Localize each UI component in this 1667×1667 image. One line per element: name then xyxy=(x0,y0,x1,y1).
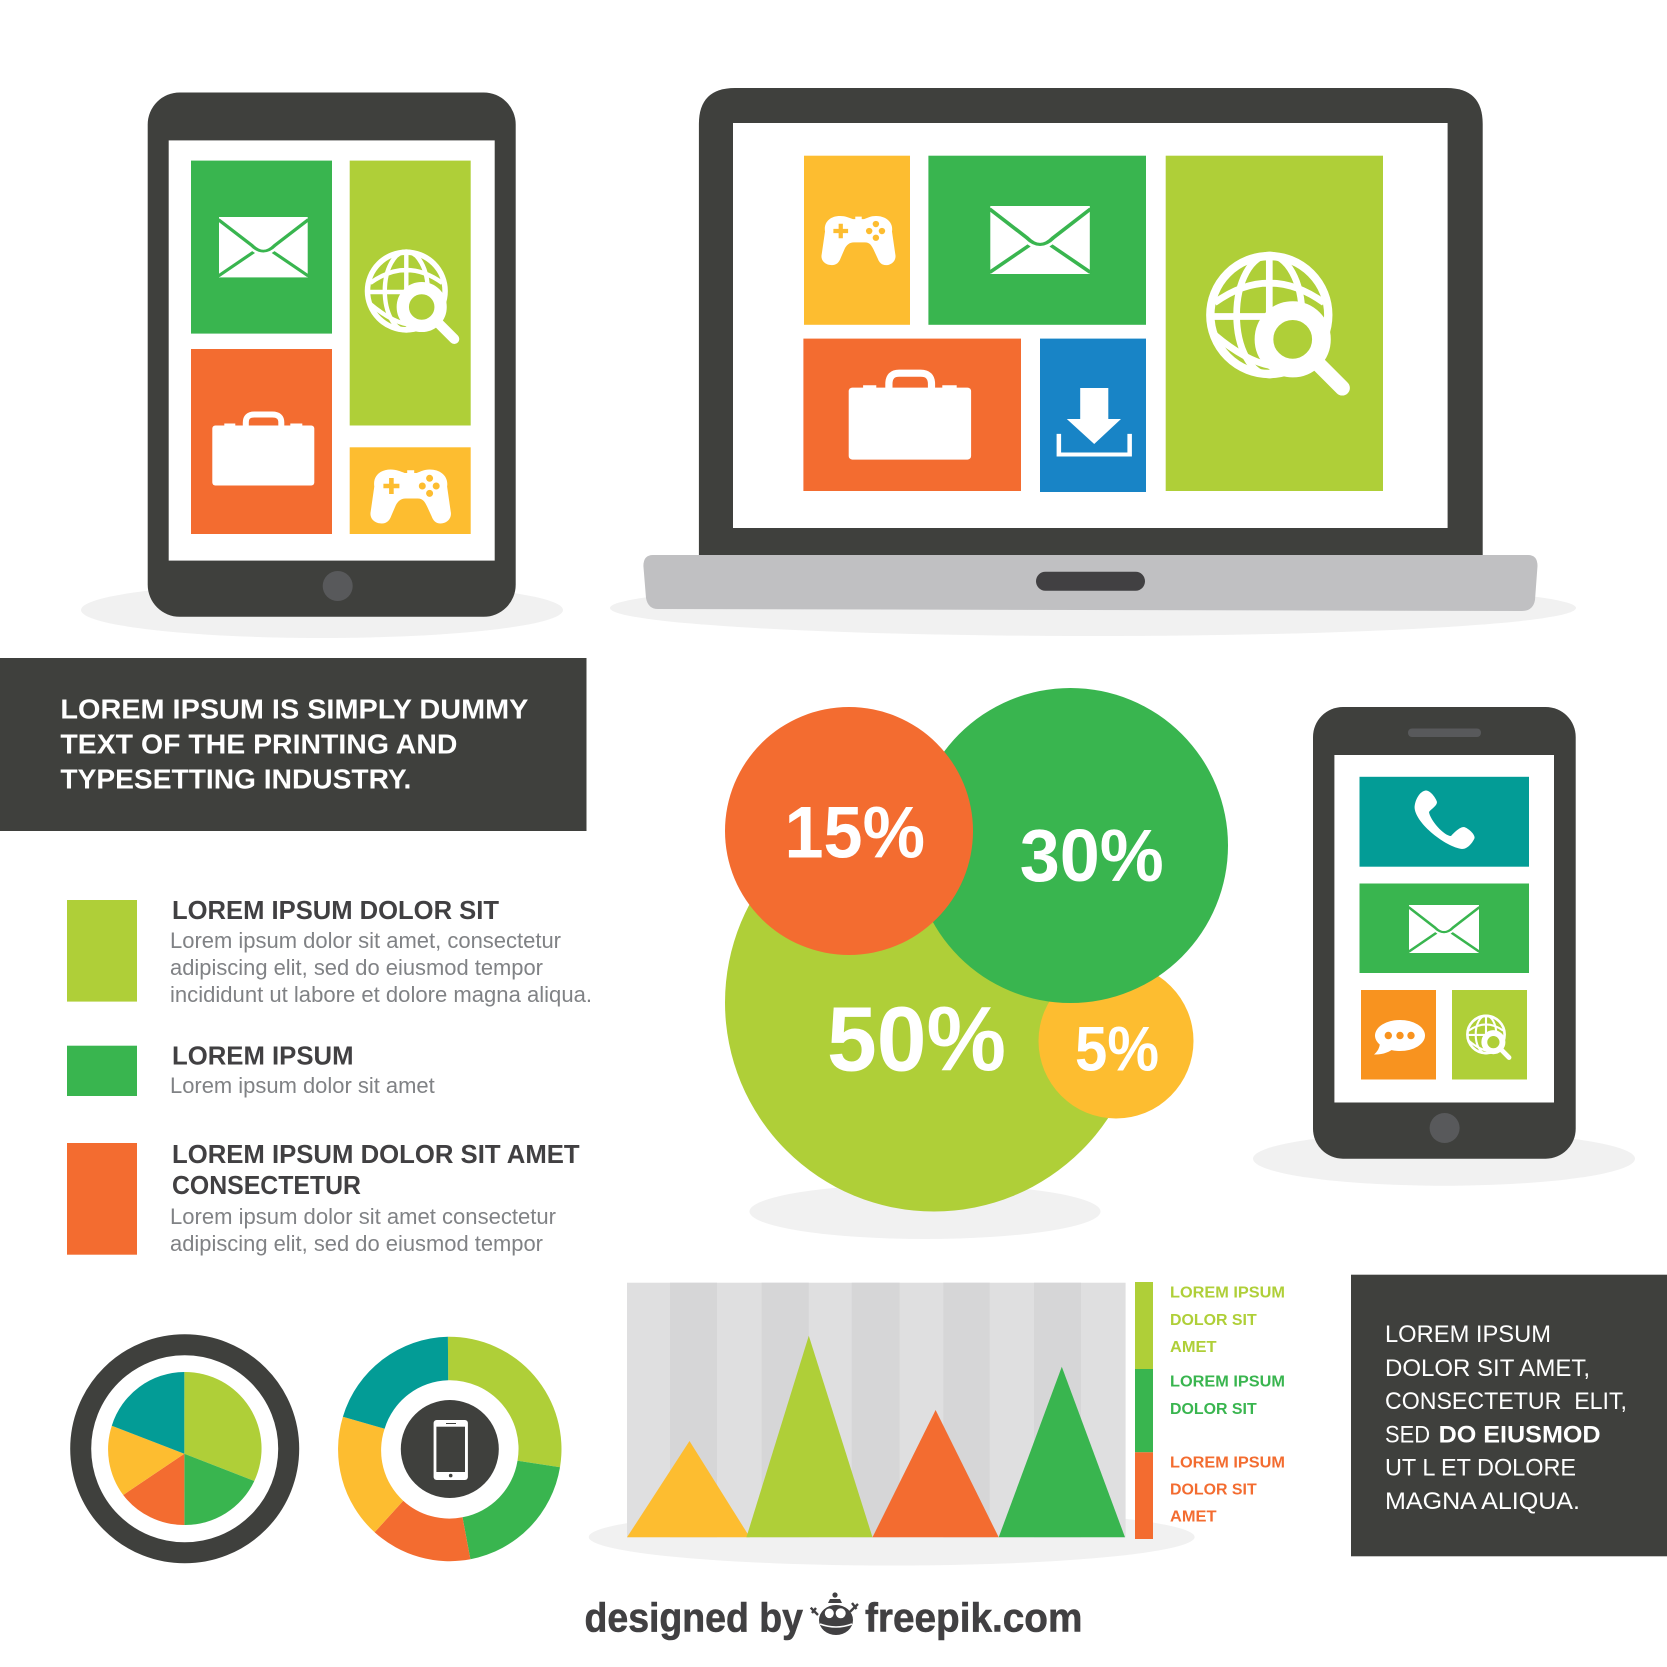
triangle: lime xyxy=(746,1336,872,1537)
legend item: lime xyxy=(67,895,592,1007)
pie chart with ring xyxy=(81,1345,289,1553)
legend item: lime: LOREM IPSUM DOLOR SIT xyxy=(172,895,499,925)
laptop tile: download xyxy=(1040,339,1146,492)
chart legend: orange: DOLOR SIT xyxy=(1170,1482,1257,1499)
laptop device xyxy=(610,88,1576,636)
bubble 5% xyxy=(1038,964,1194,1118)
icon: globe with magnifier xyxy=(1467,1015,1509,1058)
legend item: green: Lorem ipsum dolor sit amet xyxy=(170,1073,435,1098)
laptop trackpad notch xyxy=(1036,572,1145,591)
legend item: lime: Lorem ipsum dolor sit amet, consectetur xyxy=(170,928,561,953)
icon: briefcase xyxy=(212,414,314,486)
bubble chart xyxy=(725,688,1228,1239)
legend item: green xyxy=(67,1040,435,1098)
legend item: orange xyxy=(67,1139,580,1256)
icon: handset xyxy=(1415,790,1475,849)
chart legend: orange: AMET xyxy=(1170,1509,1217,1526)
banner: headline: LOREM IPSUM IS SIMPLY DUMMY xyxy=(60,693,529,724)
triangle: yellow xyxy=(627,1441,750,1537)
donut segment: lime xyxy=(448,1337,561,1467)
laptop screen xyxy=(733,123,1448,528)
bubble 50% xyxy=(725,794,1143,1212)
bubble 15% xyxy=(725,707,973,955)
phone home button xyxy=(1430,1113,1460,1143)
legend item: lime: incididunt ut labore et dolore magna aliqua. xyxy=(170,982,592,1007)
chart backdrop stripes xyxy=(627,1283,1126,1537)
chart legend: green xyxy=(1135,1369,1285,1452)
tablet tile: work xyxy=(191,349,332,534)
icon: download arrow xyxy=(1057,388,1132,456)
bubble 50%: 50% xyxy=(827,989,1006,1091)
phone speaker xyxy=(1408,728,1481,737)
phone device xyxy=(1253,707,1635,1186)
legend item: lime: adipiscing elit, sed do eiusmod tempor xyxy=(170,955,543,980)
legend item: orange: Lorem ipsum dolor sit amet consectetur xyxy=(170,1204,556,1229)
pie slice: yellow xyxy=(108,1426,184,1495)
laptop tile: games xyxy=(804,156,910,325)
bubble shadow xyxy=(750,1184,1100,1239)
tablet body xyxy=(148,92,516,617)
bubble 30% xyxy=(913,688,1228,1003)
tablet tile: search xyxy=(350,161,471,426)
panel: text block: DOLOR SIT AMET, xyxy=(1385,1355,1590,1382)
pie slice: teal xyxy=(112,1372,184,1454)
icon: gamepad xyxy=(370,470,451,524)
phone body xyxy=(1313,707,1576,1159)
phone tile: search xyxy=(1452,990,1527,1080)
chart legend: lime: AMET xyxy=(1170,1339,1217,1356)
laptop tile: mail xyxy=(928,156,1146,325)
tablet tile: mail xyxy=(191,161,332,334)
pie slice: orange xyxy=(123,1454,184,1525)
chart legend: lime xyxy=(1135,1282,1285,1369)
triangle chart xyxy=(589,1283,1195,1566)
chart legend: orange: LOREM IPSUM xyxy=(1170,1454,1285,1471)
icon: gamepad xyxy=(821,216,896,265)
panel: text block xyxy=(1351,1275,1667,1556)
tablet device xyxy=(81,92,563,638)
chart legend: green: LOREM IPSUM xyxy=(1170,1374,1285,1391)
donut chart with phone icon xyxy=(338,1337,561,1561)
bubble 15%: 15% xyxy=(784,792,925,874)
laptop lid xyxy=(699,88,1483,558)
phone tile: mail xyxy=(1360,884,1529,973)
banner: headline: TEXT OF THE PRINTING AND xyxy=(60,728,457,760)
panel: text block: SED xyxy=(1385,1422,1430,1448)
icon: globe with magnifier xyxy=(366,251,454,339)
pie slice: lime xyxy=(184,1372,262,1481)
laptop tile: search xyxy=(1166,156,1383,491)
legend item: orange: adipiscing elit, sed do eiusmod tempor xyxy=(170,1231,543,1256)
phone shadow xyxy=(1253,1132,1635,1186)
bubble 5%: 5% xyxy=(1075,1015,1159,1085)
credit: designed by freepik.com xyxy=(584,1592,1082,1641)
legend item: green: LOREM IPSUM xyxy=(172,1040,354,1070)
tablet home button xyxy=(323,571,353,601)
legend item: orange: CONSECTETUR xyxy=(172,1170,361,1200)
donut segment: orange xyxy=(375,1501,470,1561)
chart legend: lime: LOREM IPSUM xyxy=(1170,1285,1285,1302)
icon: globe with magnifier xyxy=(1208,254,1342,388)
triangle: orange xyxy=(872,1410,999,1537)
triangle: green xyxy=(999,1367,1125,1537)
panel: text block: LOREM IPSUM xyxy=(1385,1321,1551,1348)
bubble 30%: 30% xyxy=(1020,814,1164,897)
icon: speech bubble xyxy=(1374,1020,1425,1055)
icon: envelope xyxy=(218,217,309,277)
chart shadow xyxy=(589,1508,1195,1566)
donut segment: teal xyxy=(343,1337,448,1429)
legend item: orange: LOREM IPSUM DOLOR SIT AMET xyxy=(172,1139,580,1169)
phone tile: chat xyxy=(1361,990,1436,1080)
chart legend: lime: DOLOR SIT xyxy=(1170,1312,1257,1329)
icon: smartphone xyxy=(434,1420,468,1480)
donut segment: yellow xyxy=(338,1417,403,1532)
icon: freepik mascot xyxy=(811,1592,858,1635)
tablet tile: games xyxy=(350,447,471,534)
donut centre disc xyxy=(401,1400,499,1498)
laptop base xyxy=(643,555,1538,611)
pie slice: green xyxy=(184,1454,254,1525)
panel: text block: MAGNA ALIQUA. xyxy=(1385,1488,1580,1515)
chart legend: green: DOLOR SIT xyxy=(1170,1401,1257,1418)
chart legend: orange xyxy=(1135,1452,1285,1539)
tablet screen xyxy=(169,140,495,561)
outer ring xyxy=(81,1345,289,1553)
icon: briefcase xyxy=(849,373,971,460)
icon: envelope xyxy=(1408,905,1480,953)
phone tile: call xyxy=(1360,777,1529,867)
panel: text block: DO EIUSMOD xyxy=(1439,1422,1601,1448)
credit: designed by freepik.com: freepik.com xyxy=(865,1595,1082,1641)
donut segment: green xyxy=(462,1461,560,1559)
banner: headline: TYPESETTING INDUSTRY. xyxy=(60,764,411,795)
panel: text block: UT L ET DOLORE xyxy=(1385,1454,1576,1482)
credit: designed by freepik.com: designed by xyxy=(584,1595,803,1641)
laptop shadow xyxy=(610,580,1576,636)
tablet shadow xyxy=(81,582,563,638)
panel: text block: CONSECTETUR ELIT, xyxy=(1385,1388,1627,1415)
phone screen xyxy=(1334,755,1554,1102)
banner: headline xyxy=(0,658,586,831)
icon: envelope xyxy=(989,206,1091,274)
laptop tile: work xyxy=(803,339,1021,491)
